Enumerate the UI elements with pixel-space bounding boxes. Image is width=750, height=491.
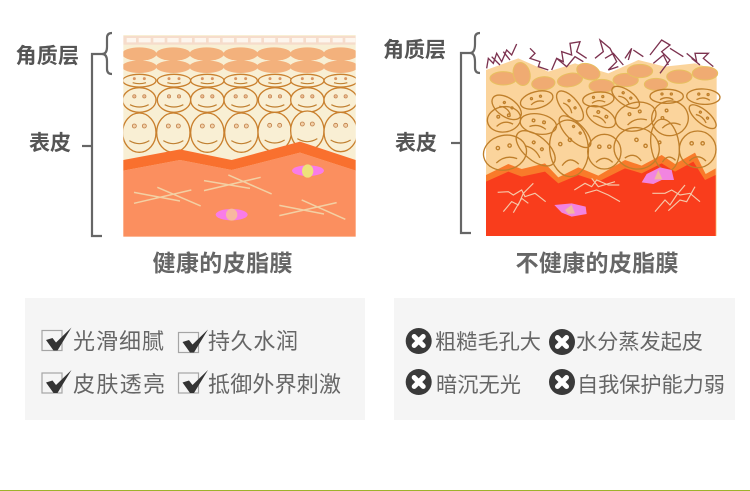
title: healthy: 健康的皮脂膜 [152,250,292,276]
item: rough pores [406,328,541,354]
item: water loss: 水分蒸发起皮 [576,330,703,354]
brackets: healthy [82,33,112,236]
panel: healthy skin diagram [122,35,358,237]
orange cells [122,47,358,73]
title: unhealthy: 不健康的皮脂膜 [516,250,678,276]
broken fibres [498,178,700,213]
sad faces [480,82,720,178]
flakes [487,40,713,73]
panel: healthy benefits [25,298,365,420]
panel: unhealthy problems [394,298,735,420]
item: translucent skin: 皮肤透亮 [73,372,165,397]
label: stratum corneum, unhealthy: 角质层 [383,39,446,62]
item: resists irritation: 抵御外界刺激 [208,372,341,397]
flat cells [490,60,718,93]
brackets: unhealthy [451,33,480,233]
item: weak protection: 自我保护能力弱 [577,373,725,397]
panel: unhealthy skin diagram [480,40,720,236]
item: smooth: 光滑细腻 [73,329,164,354]
item: lasting moisture: 持久水润 [208,329,298,354]
item: rough pores: 粗糙毛孔大 [435,330,541,354]
label: epidermis, healthy: 表皮 [29,132,71,155]
item: dull: 暗沉无光 [436,373,521,397]
item: translucent skin [42,370,165,397]
label: stratum corneum, healthy: 角质层 [16,45,79,68]
item: dull [406,369,521,397]
item: weak protection [549,369,725,397]
label: epidermis, unhealthy: 表皮 [395,132,437,155]
